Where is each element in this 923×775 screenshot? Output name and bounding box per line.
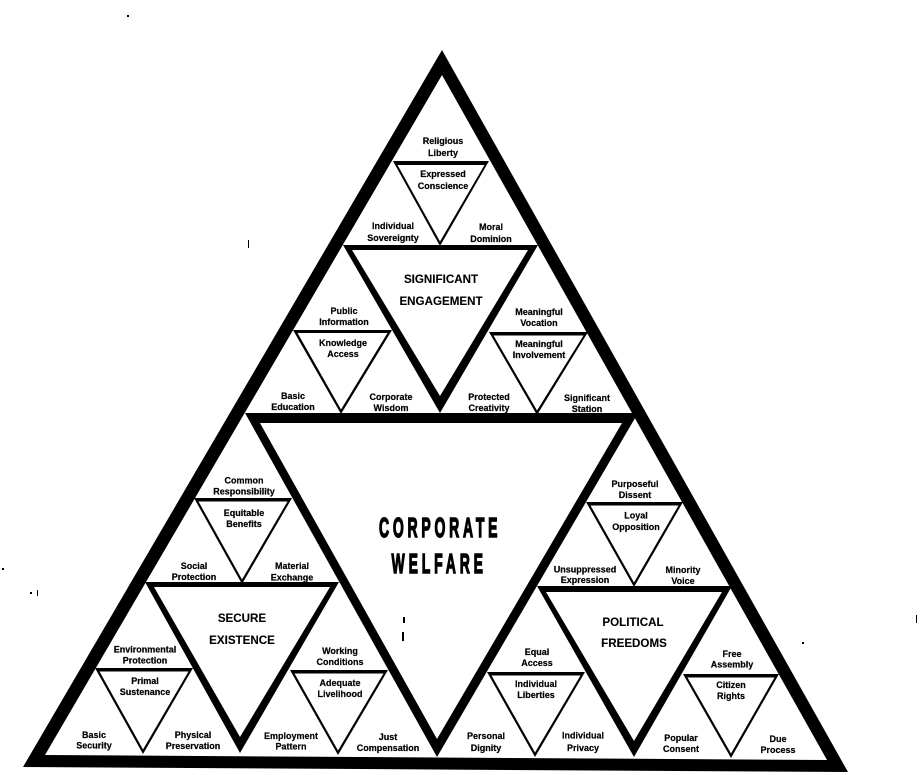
group: expressed conscience: Expressed <box>420 169 466 179</box>
group: citizen rights: Process <box>760 745 796 755</box>
group: primal sustenance: Physical <box>175 730 211 740</box>
group: meaningful involvement: Involvement <box>513 350 565 360</box>
group: meaningful involvement: Station <box>572 404 602 414</box>
group: expressed conscience: Dominion <box>470 234 512 244</box>
group: citizen rights: Due <box>769 734 787 744</box>
group: primal sustenance <box>76 644 220 754</box>
group: knowledge access: Corporate <box>369 392 413 402</box>
panel: significant engagement: ENGAGEMENT <box>399 295 483 308</box>
group: adequate livelihood: Working <box>322 646 358 656</box>
group: primal sustenance: Preservation <box>166 741 220 751</box>
group: knowledge access <box>271 306 413 414</box>
group: citizen rights: Rights <box>717 691 745 701</box>
group: individual liberties: Privacy <box>567 743 599 753</box>
group: individual liberties: Access <box>521 658 553 668</box>
group: meaningful involvement: Creativity <box>468 403 510 413</box>
group: primal sustenance: Basic <box>82 730 106 740</box>
group: individual liberties: Individual <box>515 679 557 689</box>
group: adequate livelihood: Adequate <box>319 678 361 688</box>
group: loyal opposition <box>554 479 700 587</box>
group: citizen rights: Free <box>722 649 742 659</box>
group: loyal opposition: Unsuppressed <box>554 564 616 574</box>
group: meaningful involvement: Protected <box>468 392 510 402</box>
group: expressed conscience <box>367 136 512 246</box>
group: equitable benefits: Social <box>181 561 207 571</box>
group: knowledge access: Wisdom <box>374 403 408 413</box>
group: citizen rights: Consent <box>663 744 699 754</box>
group: knowledge access: Access <box>327 349 359 359</box>
central panel: corporate welfare <box>245 413 638 757</box>
group: individual liberties: Liberties <box>517 690 555 700</box>
group: knowledge access: Education <box>271 402 315 412</box>
group: expressed conscience: Liberty <box>428 148 458 158</box>
group: expressed conscience: Religious <box>423 136 463 146</box>
group: citizen rights: Popular <box>664 733 698 743</box>
group: individual liberties: Individual <box>562 730 604 740</box>
group: loyal opposition: Minority <box>666 565 700 575</box>
group: meaningful involvement: Meaningful <box>515 307 563 317</box>
group: equitable benefits: Equitable <box>224 508 264 518</box>
group: loyal opposition: Loyal <box>624 510 648 520</box>
group: individual liberties: Personal <box>467 731 505 741</box>
group: knowledge access: Information <box>319 317 369 327</box>
central panel: corporate welfare: WELFARE <box>392 548 486 579</box>
group: individual liberties <box>467 647 604 757</box>
group: loyal opposition: Dissent <box>619 490 651 500</box>
group: adequate livelihood: Employment <box>264 731 318 741</box>
group: expressed conscience: Moral <box>479 222 503 232</box>
group: meaningful involvement: Significant <box>564 393 610 403</box>
group: knowledge access: Basic <box>281 391 305 401</box>
group: expressed conscience: Sovereignty <box>367 233 419 243</box>
group: adequate livelihood: Conditions <box>316 657 364 667</box>
group: equitable benefits: Common <box>224 476 264 486</box>
group: adequate livelihood: Compensation <box>357 743 419 753</box>
panel: secure existence <box>145 582 339 753</box>
group: meaningful involvement <box>468 307 610 415</box>
group: loyal opposition: Expression <box>561 575 609 585</box>
group: equitable benefits: Exchange <box>271 572 313 582</box>
group: equitable benefits <box>172 476 313 584</box>
group: adequate livelihood: Just <box>379 732 397 742</box>
group: knowledge access: Knowledge <box>319 338 367 348</box>
group: loyal opposition: Voice <box>671 576 695 586</box>
group: individual liberties: Dignity <box>471 743 501 753</box>
panel: political freedoms <box>537 586 732 757</box>
group: equitable benefits: Responsibility <box>213 486 275 496</box>
group: equitable benefits: Protection <box>172 572 216 582</box>
group: citizen rights: Citizen <box>716 680 746 690</box>
group: primal sustenance: Protection <box>123 656 167 666</box>
group: citizen rights <box>663 649 796 758</box>
group: loyal opposition: Opposition <box>612 522 660 532</box>
panel: political freedoms: FREEDOMS <box>601 637 667 650</box>
panel: significant engagement: SIGNIFICANT <box>404 273 478 286</box>
group: primal sustenance: Sustenance <box>120 687 170 697</box>
panel: secure existence: EXISTENCE <box>209 634 275 647</box>
group: meaningful involvement: Vocation <box>520 318 558 328</box>
group: individual liberties: Equal <box>525 647 549 657</box>
group: expressed conscience: Conscience <box>418 181 468 191</box>
group: adequate livelihood <box>264 646 419 755</box>
group: expressed conscience: Individual <box>372 221 414 231</box>
group: primal sustenance: Security <box>76 740 112 750</box>
group: adequate livelihood: Pattern <box>275 742 307 752</box>
panel: political freedoms: POLITICAL <box>602 616 664 629</box>
group: knowledge access: Public <box>330 306 358 316</box>
group: meaningful involvement: Meaningful <box>515 339 563 349</box>
panel: secure existence: SECURE <box>218 612 266 625</box>
group: equitable benefits: Material <box>275 561 309 571</box>
panel: significant engagement <box>343 245 538 413</box>
group: primal sustenance: Environmental <box>114 644 176 654</box>
group: primal sustenance: Primal <box>131 676 159 686</box>
central panel: corporate welfare: CORPORATE <box>379 512 501 543</box>
group: adequate livelihood: Livelihood <box>318 689 362 699</box>
group: citizen rights: Assembly <box>711 660 753 670</box>
group: equitable benefits: Benefits <box>226 519 262 529</box>
group: loyal opposition: Purposeful <box>611 479 659 489</box>
